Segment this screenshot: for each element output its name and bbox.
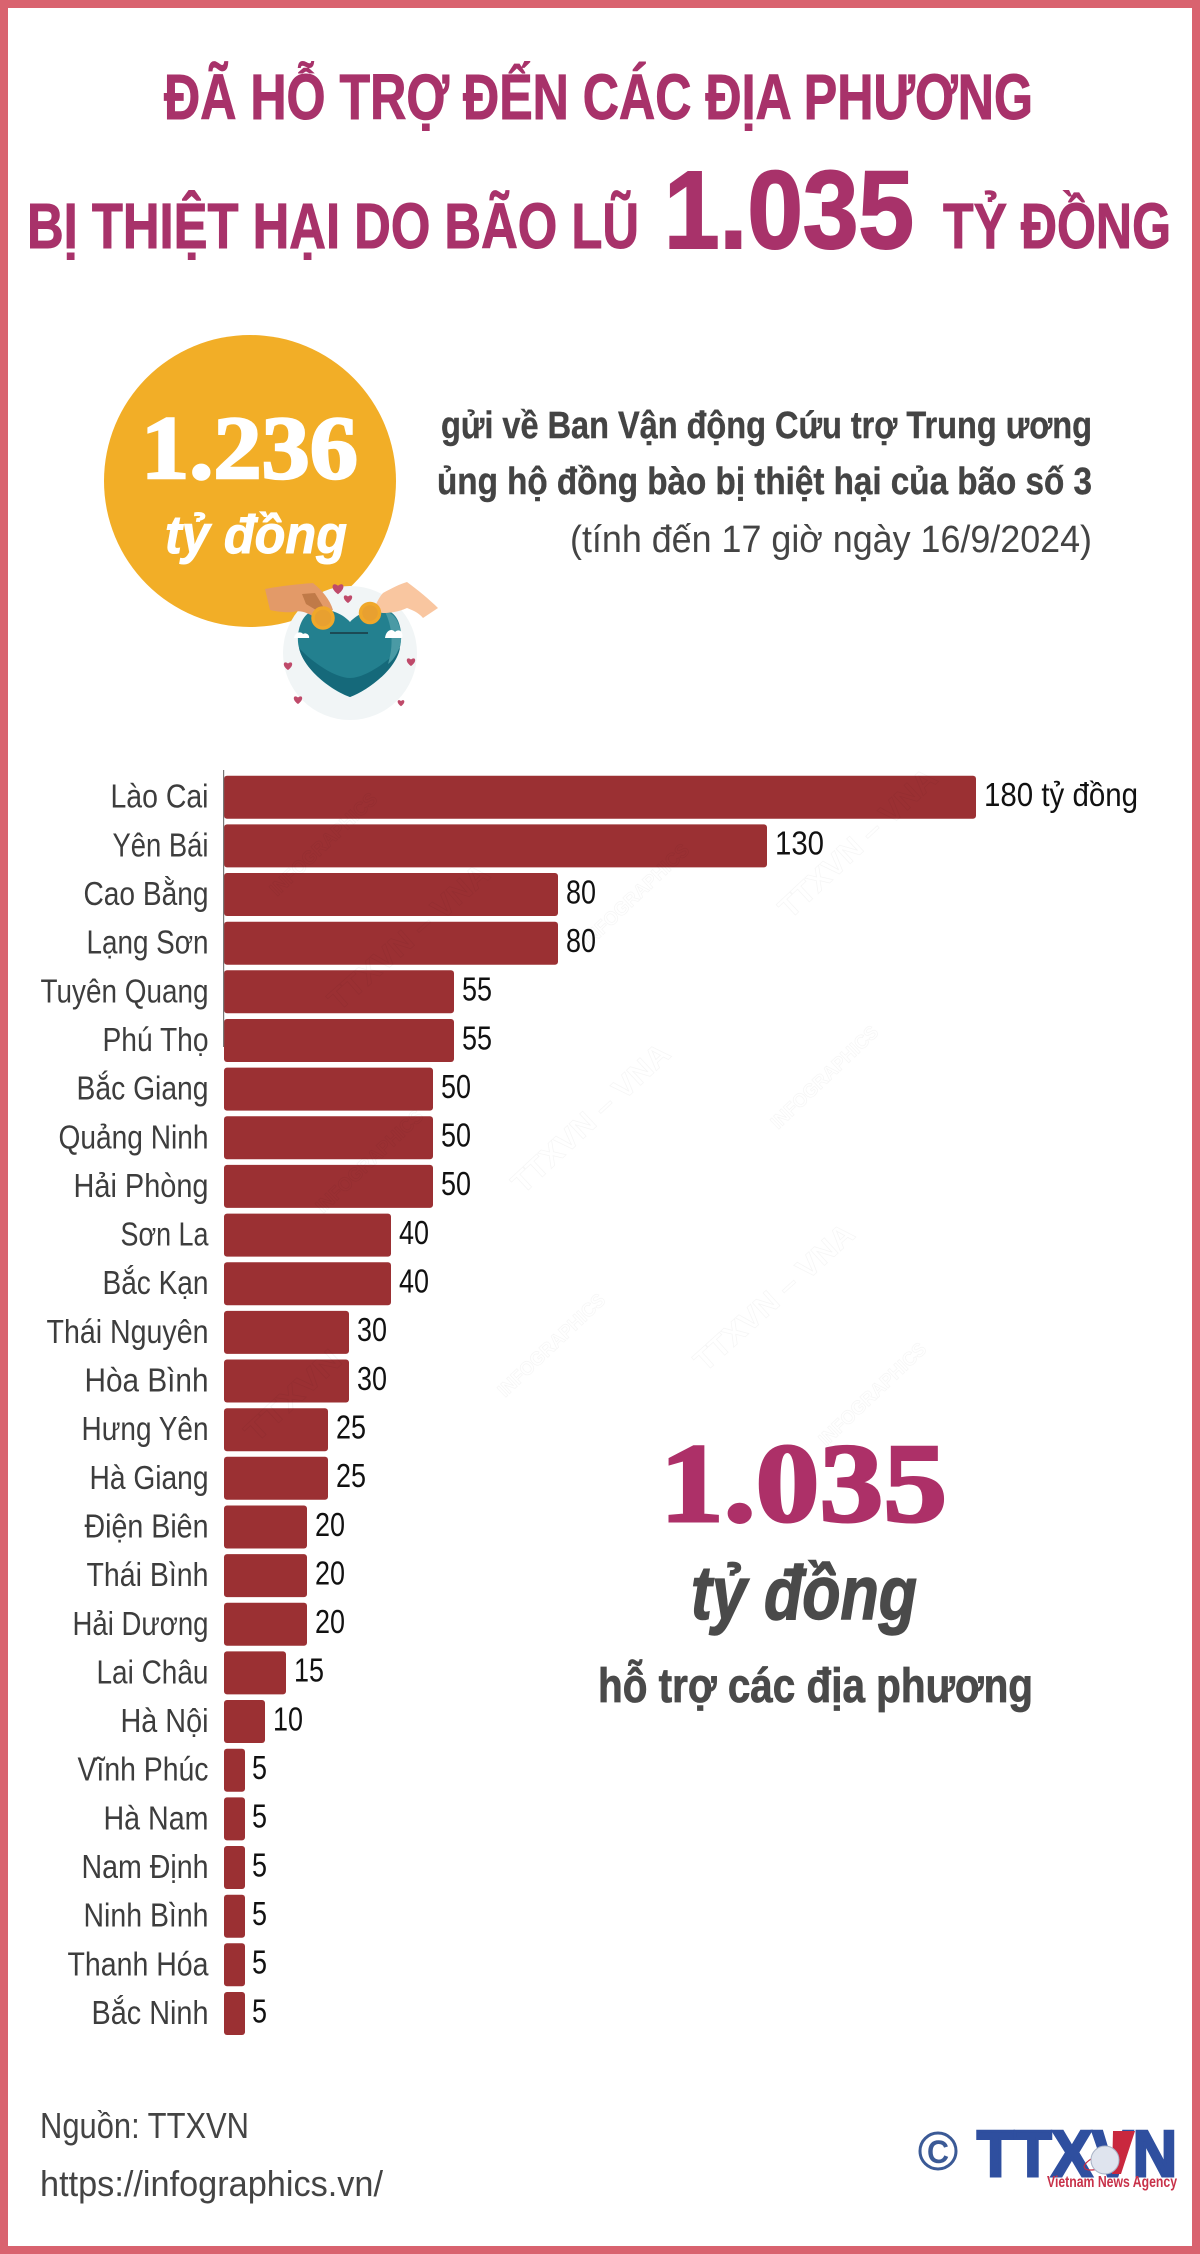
row: Hòa Bình [84, 1360, 387, 1402]
row: Phú Thọ [102, 1019, 492, 1062]
logo: TTXVN: TTXVN [977, 2117, 1177, 2190]
row: Thanh Hóa: Thanh Hóa [68, 1945, 209, 1982]
row: Bắc Ninh: 5 [252, 1992, 267, 2029]
row: Bắc Kạn [102, 1262, 429, 1305]
row: Thái Bình: Thái Bình [86, 1556, 208, 1593]
row: Hải Phòng [74, 1165, 471, 1208]
source text: https://infographics.vn/ [40, 2163, 383, 2204]
row: Phú Thọ: 55 [462, 1019, 492, 1056]
callout: total support: hỗ trợ các địa phương [598, 1659, 1033, 1713]
row: Hà Nội: Hà Nội [120, 1702, 208, 1739]
description text: ủng hộ đồng bào bị thiệt hại của bão số 3 [437, 461, 1092, 503]
coins [313, 608, 333, 628]
halo [283, 586, 417, 720]
row: Thái Nguyên: 30 [357, 1311, 387, 1348]
row: Sơn La: 40 [399, 1214, 429, 1251]
row: Hà Giang: Hà Giang [90, 1459, 208, 1496]
row: Tuyên Quang: Tuyên Quang [40, 972, 208, 1009]
row: Phú Thọ: Phú Thọ [102, 1021, 208, 1058]
icon: hands putting coins into heart [265, 582, 438, 720]
row: Yên Bái: 130 [775, 825, 824, 862]
row: Hà Nam: 5 [252, 1798, 267, 1835]
row: Hải Dương: 20 [315, 1603, 345, 1640]
watermarks: INFOGRAPHICS [494, 1290, 610, 1402]
row: Hải Phòng: Hải Phòng [74, 1167, 208, 1204]
watermarks: INFOGRAPHICS [815, 1339, 931, 1451]
row: Lào Cai: Lào Cai [110, 778, 208, 815]
row: Ninh Bình [84, 1895, 267, 1938]
row: Thái Nguyên [46, 1311, 387, 1354]
row: Nam Định [82, 1846, 267, 1889]
chart axis [223, 770, 224, 1047]
watermarks: INFOGRAPHICS [266, 789, 382, 901]
row: Điện Biên [84, 1506, 345, 1548]
row: Hà Giang: 25 [336, 1457, 366, 1494]
row: Thanh Hóa: 5 [252, 1944, 267, 1981]
title: BỊ THIỆT HẠI DO BÃO LŨ [27, 189, 639, 262]
row: Điện Biên: Điện Biên [84, 1508, 208, 1544]
description text [437, 405, 1092, 561]
row: Vĩnh Phúc: 5 [252, 1749, 267, 1786]
row: Lào Cai: 180 tỷ đồng [984, 776, 1138, 813]
row: Bắc Ninh: Bắc Ninh [92, 1994, 208, 2031]
row: Hưng Yên: Hưng Yên [82, 1410, 208, 1447]
row: Hà Giang [90, 1457, 366, 1500]
row: Bắc Giang [76, 1068, 471, 1111]
row: Hưng Yên: 25 [336, 1408, 366, 1446]
row: Bắc Kạn: 40 [399, 1262, 429, 1300]
row: Hà Nam: Hà Nam [104, 1799, 208, 1836]
row: Cao Bằng: Cao Bằng [84, 875, 208, 912]
watermarks: TTXVN – VNA [322, 857, 496, 1017]
watermarks: INFOGRAPHICS [578, 840, 694, 952]
row: Điện Biên: 20 [315, 1506, 345, 1543]
row: Lai Châu: 15 [294, 1652, 324, 1689]
row: Hải Dương: Hải Dương [72, 1605, 208, 1642]
row: Nam Định: 5 [252, 1846, 267, 1883]
title: 1.035 [664, 149, 914, 272]
watermarks: INFOGRAPHICS [312, 1106, 428, 1218]
heart [298, 610, 401, 697]
row: Ninh Bình: 5 [252, 1895, 267, 1932]
bar chart [40, 770, 1138, 2035]
source text: Nguồn: TTXVN [40, 2105, 249, 2146]
title [27, 60, 1171, 272]
row: Hải Dương [72, 1603, 345, 1646]
yellow circle with total: tỷ đồng [165, 505, 347, 565]
row: Yên Bái [112, 824, 824, 867]
row: Sơn La: Sơn La [120, 1216, 209, 1253]
callout: total support [598, 1422, 1033, 1713]
yellow circle with total [104, 335, 396, 627]
watermarks [238, 762, 944, 1451]
left hand [265, 583, 333, 620]
watermarks: TTXVN – VNA [505, 1037, 677, 1200]
right hand [373, 582, 438, 618]
row: Thái Bình: 20 [315, 1554, 345, 1591]
row: Cao Bằng [84, 873, 596, 916]
row: Bắc Kạn: Bắc Kạn [102, 1264, 208, 1301]
source text [40, 2105, 383, 2204]
row: Hà Nội [120, 1700, 303, 1743]
row: Lào Cai [110, 776, 1138, 819]
row: Lạng Sơn: 80 [566, 922, 596, 959]
watermarks: TTXVN – VNA [772, 762, 944, 925]
row: Bắc Giang: Bắc Giang [76, 1070, 208, 1107]
row: Yên Bái: Yên Bái [112, 826, 208, 863]
row: Hà Nam [104, 1797, 267, 1840]
row: Bắc Ninh [92, 1992, 267, 2035]
row: Quảng Ninh: Quảng Ninh [58, 1118, 208, 1155]
panel: total received [104, 335, 1092, 720]
callout: total support: tỷ đồng [691, 1551, 917, 1636]
row: Lai Châu [96, 1651, 324, 1694]
row: Lai Châu: Lai Châu [96, 1653, 208, 1690]
row: Ninh Bình: Ninh Bình [84, 1897, 208, 1934]
row: Hòa Bình: Hòa Bình [84, 1362, 208, 1398]
row: Quảng Ninh: 50 [441, 1117, 471, 1154]
logo: TTXVN: C [927, 2134, 949, 2170]
clouds [294, 632, 309, 638]
row: Tuyên Quang: 55 [462, 971, 492, 1008]
yellow circle with total: 1.236 [141, 399, 358, 498]
description text: (tính đến 17 giờ ngày 16/9/2024) [570, 519, 1092, 561]
row: Hòa Bình: 30 [357, 1360, 387, 1397]
row: Thái Nguyên: Thái Nguyên [46, 1313, 208, 1350]
row: Lạng Sơn: Lạng Sơn [86, 924, 208, 961]
row: Cao Bằng: 80 [566, 873, 596, 910]
description text: gửi về Ban Vận động Cứu trợ Trung ương [441, 405, 1092, 447]
row: Vĩnh Phúc: Vĩnh Phúc [78, 1751, 208, 1788]
row: Nam Định: Nam Định [82, 1848, 208, 1885]
row: Vĩnh Phúc [78, 1749, 267, 1792]
watermarks: TTXVN [238, 1343, 349, 1449]
row: Tuyên Quang [40, 970, 492, 1013]
watermarks: INFOGRAPHICS [767, 1022, 883, 1134]
row: Thái Bình [86, 1554, 345, 1597]
row: Hà Nội: 10 [273, 1700, 303, 1737]
row: Lạng Sơn [86, 922, 596, 965]
watermarks: TTXVN – VNA [688, 1217, 861, 1378]
callout: total support: 1.035 [660, 1422, 947, 1546]
row: Hải Phòng: 50 [441, 1165, 471, 1202]
row: Bắc Giang: 50 [441, 1068, 471, 1105]
small hearts [333, 584, 343, 594]
row: Sơn La [120, 1214, 429, 1257]
row: Quảng Ninh [58, 1116, 471, 1159]
row: Hưng Yên [82, 1408, 366, 1451]
